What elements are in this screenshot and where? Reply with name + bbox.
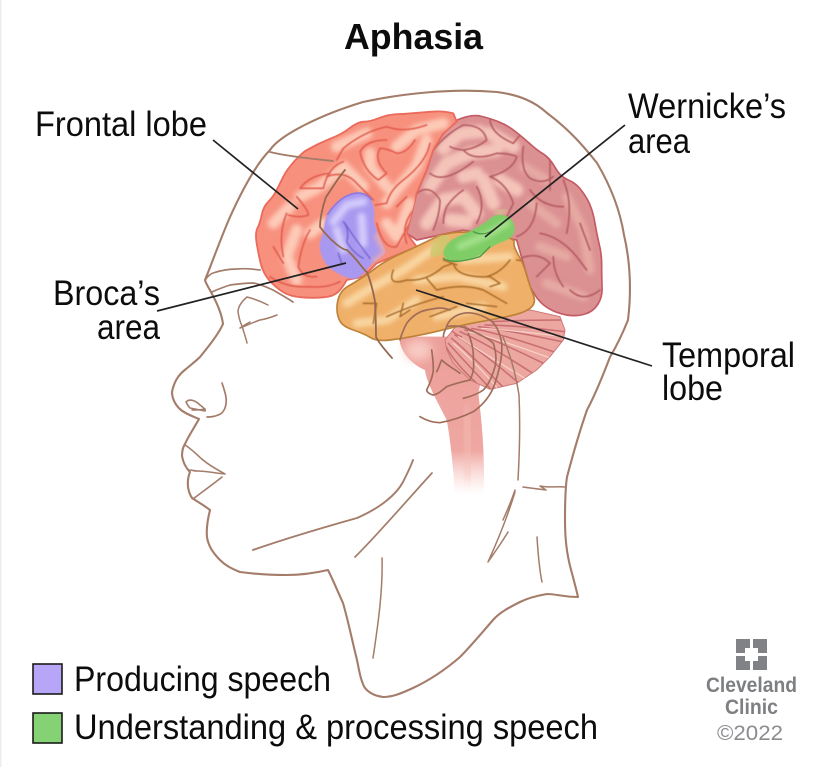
label: Broca's area: area (97, 308, 160, 347)
nostril (186, 400, 205, 411)
title: Aphasia (344, 16, 484, 57)
page edge (0, 0, 2, 767)
hairline (270, 152, 333, 161)
leader lines (157, 125, 652, 366)
leader: frontal lobe (213, 140, 298, 209)
logo: Cleveland Clinic: ©2022 (717, 722, 783, 745)
head, skull and face profile (172, 91, 630, 697)
frontal lobe (256, 111, 457, 298)
label: Temporal lobe: Temporal (662, 336, 795, 375)
label: Wernicke's area: Wernicke’s (628, 87, 786, 126)
leader: Broca's area (157, 263, 346, 311)
brainstem (399, 337, 490, 495)
temple line (320, 170, 392, 358)
legend (33, 660, 598, 747)
illustration: head outline (172, 91, 630, 697)
region: Broca's area, producing speech (320, 193, 387, 279)
leader: temporal lobe (416, 290, 652, 366)
label: Wernicke's area: area (628, 122, 690, 161)
forehead band (205, 269, 293, 302)
label: Broca's area: Broca’s (53, 274, 160, 313)
leader: Wernicke's area (485, 125, 625, 237)
icon: Cleveland Clinic mark (736, 639, 767, 670)
logo: Cleveland Clinic: Clinic (725, 696, 778, 719)
eye (238, 297, 277, 343)
label: Frontal lobe: Frontal lobe (35, 105, 207, 144)
illustration: cerebrum (256, 111, 602, 340)
inner neck lines (373, 337, 565, 658)
parietal and occipital region (407, 116, 602, 316)
jaw line (253, 460, 413, 550)
label: Temporal lobe: lobe (662, 369, 723, 408)
illustration: ear (400, 308, 502, 423)
logo: Cleveland Clinic: Cleveland (706, 674, 797, 697)
legend item: producing speech: Producing speech (74, 660, 331, 699)
nose wing (207, 383, 226, 417)
cerebellum (445, 310, 565, 389)
temporal lobe (337, 232, 543, 340)
lips (185, 445, 225, 499)
legend item: understanding and processing speech: Understanding & processing speech (74, 708, 598, 747)
neck line (355, 473, 432, 557)
logo: Cleveland Clinic (706, 639, 797, 745)
illustration: brain stem and cerebellum (399, 310, 565, 495)
region: Wernicke's area, understanding speech (433, 210, 515, 262)
